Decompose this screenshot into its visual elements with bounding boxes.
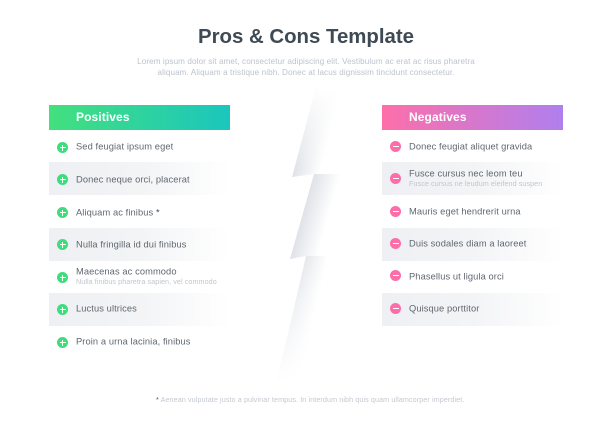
panel: negatives — [382, 105, 563, 326]
item 3: Mauris eget hendrerit urna — [409, 206, 521, 216]
item 2: Fusce cursus nec leom teu — [409, 168, 523, 178]
intro text: aliquam. Aliquam a tristique nibh. Donec at lacus dignissim tincidunt consectetur. — [157, 68, 455, 77]
row stripe 2 — [49, 162, 230, 195]
item 1: Sed feugiat ipsum eget — [76, 142, 173, 152]
plus icon 6 — [57, 304, 68, 315]
plus icon 5 — [57, 272, 68, 283]
item 2: Donec neque orci, placerat — [76, 174, 190, 184]
row stripe 6 — [49, 293, 230, 326]
minus icon 2 — [390, 173, 401, 184]
minus icon 3 — [390, 206, 401, 217]
row stripe 6 — [382, 293, 563, 326]
plus icon 4 — [57, 239, 68, 250]
minus icon 1 — [390, 141, 401, 152]
item 1: Donec feugiat aliquet gravida — [409, 142, 532, 152]
minus icon 4 — [390, 238, 401, 249]
item 6: Quisque porttitor — [409, 304, 479, 314]
footnote: * Aenean vulputate justo a pulvinar tempus. In interdum nibh quis quam ullamcorper imperdiet. — [156, 395, 464, 404]
positives heading — [49, 105, 230, 130]
plus icon 1 — [57, 142, 68, 153]
plus icon 3 — [57, 207, 68, 218]
panel: positives — [49, 105, 230, 348]
item 6: Luctus ultrices — [76, 304, 137, 314]
negatives heading: Negatives — [409, 110, 467, 124]
item 4: Nulla fringilla id dui finibus — [76, 240, 186, 250]
minus icon 6 — [390, 303, 401, 314]
row stripe 2 — [382, 162, 563, 195]
item 5 note: Nulla finibus pharetra sapien, vel commodo — [76, 277, 217, 286]
plus icon 2 — [57, 174, 68, 185]
item 2 note: Fusce cursus ne leudum eleifend suspen — [409, 179, 542, 188]
item 4: Duis sodales diam a laoreet — [409, 238, 526, 248]
item 7: Proin a urna lacinia, finibus — [76, 336, 191, 346]
intro text — [137, 57, 475, 77]
row stripe 4 — [382, 228, 563, 261]
positives heading: Positives — [76, 110, 130, 124]
row stripe 4 — [49, 228, 230, 261]
item 5: Phasellus ut ligula orci — [409, 272, 504, 282]
plus icon 7 — [57, 337, 68, 348]
item 3: Aliquam ac finibus * — [76, 208, 160, 218]
lightning bolt divider — [282, 92, 334, 360]
negatives heading — [382, 105, 563, 130]
intro text: Lorem ipsum dolor sit amet, consectetur adipiscing elit. Vestibulum ac erat ac risus pharetra — [137, 57, 475, 66]
item 5: Maecenas ac commodo — [76, 266, 177, 276]
minus icon 5 — [390, 270, 401, 281]
title: Pros & Cons Template — [198, 26, 414, 48]
